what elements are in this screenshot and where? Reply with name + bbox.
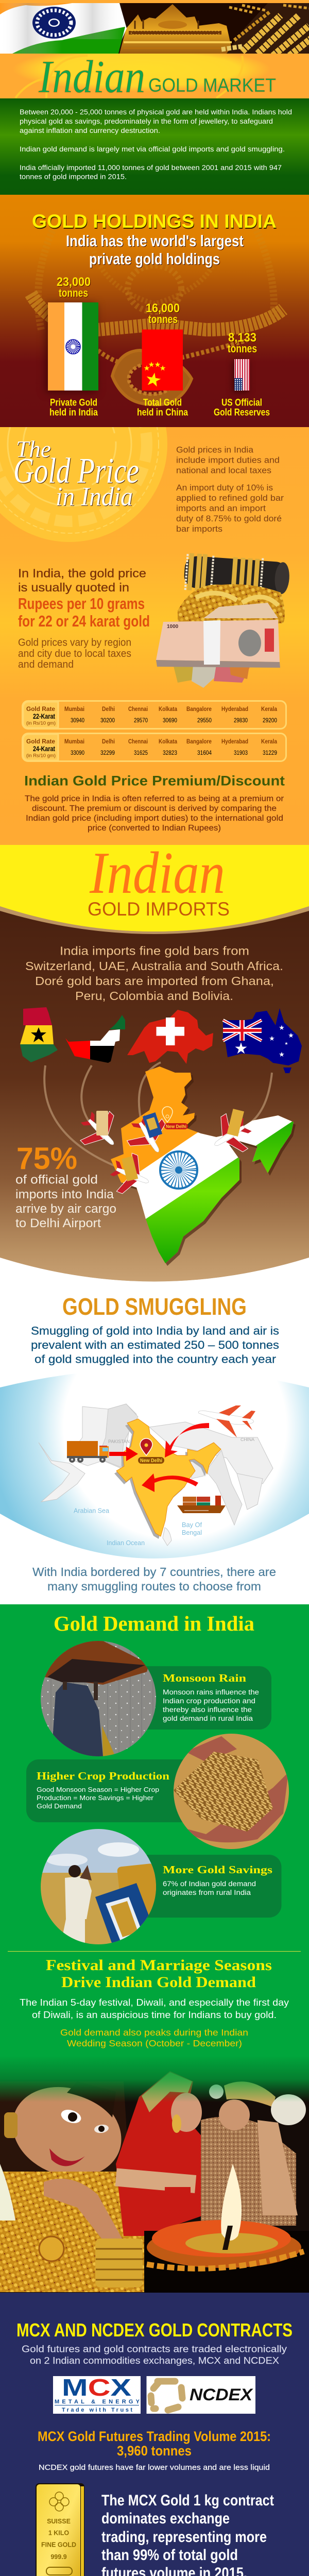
table: 24 karat rates: 31903 xyxy=(234,749,248,756)
table: 24 karat rates: 32299 xyxy=(100,749,115,756)
text: MCX 1 kg contract xyxy=(101,2492,274,2576)
photo panel: weddings and festival lamp xyxy=(0,2056,309,2293)
map labels: Indian Ocean xyxy=(107,1539,145,1547)
icon: 1 kg gold bar: FINE GOLD xyxy=(41,2541,76,2548)
text: quoted in rupees xyxy=(18,567,150,630)
heading: festival and marriage seasons xyxy=(46,1957,272,1991)
table: 22 karat rates: (in Rs/10 gm) xyxy=(26,721,56,726)
stat: 75 percent air cargo: to Delhi Airport xyxy=(15,1216,101,1230)
value: India tonnes xyxy=(57,275,91,299)
table: 24 karat rates xyxy=(23,734,286,761)
title: Indian Gold Market xyxy=(38,52,276,103)
panel: gold holdings in India xyxy=(0,195,309,427)
intro paragraphs xyxy=(20,108,292,180)
text: wedding season xyxy=(60,2027,248,2048)
card: more gold savings: 67% of Indian gold demand xyxy=(163,1880,256,1888)
intro paragraphs: India officially imported 11,000 tonnes of gold between 2001 and 2015 with 947 xyxy=(20,164,282,172)
text: smuggling routes: many smuggling routes to choose from xyxy=(47,1580,261,1593)
panel: gold smuggling xyxy=(0,1258,309,1604)
icon: airplane xyxy=(198,1405,255,1437)
table: 24 karat rates: 31604 xyxy=(197,749,212,756)
logo: MCX: M CX xyxy=(62,2374,131,2401)
table: 24 karat rates: Chennai xyxy=(128,738,148,745)
bar: China flag xyxy=(142,330,183,391)
map marker: New Delhi: New Delhi xyxy=(166,1124,186,1129)
icon: cargo plane 1 with gold bar xyxy=(72,1103,128,1159)
map labels: CHINA xyxy=(241,1437,254,1442)
table: 22 karat rates: Hyderabad xyxy=(221,705,248,713)
value: US tonnes xyxy=(228,331,257,355)
text: source countries: Peru, Colombia and Bolivia. xyxy=(75,989,233,1003)
text: source countries xyxy=(25,944,283,1003)
background necklace xyxy=(25,263,287,406)
heading: Indian gold imports: Indian xyxy=(89,840,225,906)
map shape: Australia: ★ xyxy=(234,1040,248,1057)
text: quoted in rupees: In India, the gold price xyxy=(18,567,146,580)
table: 24 karat rates: 31625 xyxy=(134,749,148,756)
heading: gold holdings: GOLD HOLDINGS IN INDIA xyxy=(32,211,277,232)
logo: MCX xyxy=(53,2374,141,2414)
table: 22 karat rates: Mumbai xyxy=(64,705,84,713)
text: MCX 1 kg contract: than 99% of total gold xyxy=(101,2547,238,2564)
table: 22 karat rates: 29200 xyxy=(263,717,277,724)
heading: premium and discount: Indian Gold Price Premium/Discount xyxy=(24,773,285,788)
card: higher crop production: Good Monsoon Season = Higher Crop xyxy=(37,1786,159,1793)
value: China tonnes: 16,000 xyxy=(146,301,180,315)
table: 24 karat rates: Delhi xyxy=(102,738,115,745)
map marker: New Delhi pin: New Delhi xyxy=(140,1458,162,1464)
panel: MCX and NCDEX gold contracts xyxy=(0,2293,309,2576)
text: MCX 1 kg contract: trading, representing more xyxy=(101,2529,267,2546)
table: 22 karat rates: Delhi xyxy=(102,705,115,713)
table: 22 karat rates: 30200 xyxy=(100,717,115,724)
intro paragraphs: physical gold as savings, predominately in the form of jewellery, to safeguard xyxy=(20,117,273,125)
text: smuggling intro: prevalent with an estimated 250 – 500 tonnes xyxy=(31,1338,279,1351)
text: regional variation: Gold prices vary by region xyxy=(18,637,131,649)
heading: gold price in India: The xyxy=(16,436,51,462)
logo: NCDEX xyxy=(146,2376,255,2414)
photo: oil lamp xyxy=(144,2164,309,2293)
panel: title band xyxy=(0,52,309,103)
text: premium explanation xyxy=(25,794,284,833)
text: premium explanation: price (converted to Indian Rupees) xyxy=(88,824,221,833)
text: quoted in rupees: Rupees per 10 grams xyxy=(18,595,145,613)
map shape: Australia: ★ xyxy=(284,1041,288,1046)
text: Diwali: of Diwali, is an auspicious time for Indians to buy gold. xyxy=(32,2009,277,2020)
map marker: New Delhi xyxy=(162,1107,188,1129)
map labels: PAKISTAN xyxy=(108,1439,130,1445)
neighbouring land xyxy=(39,1404,273,1546)
logo: MCX: METAL & ENERGY xyxy=(55,2399,140,2405)
title: Indian Gold Market: GOLD MARKET xyxy=(148,75,276,96)
table: 22 karat rates: 30690 xyxy=(163,717,177,724)
text: exchanges: on 2 Indian commodities exchanges, MCX and NCDEX xyxy=(30,2355,279,2366)
banner photo: golden temple xyxy=(119,4,233,54)
icon: cargo plane 2 with gold bar xyxy=(121,1108,176,1163)
card: monsoon rain: Monsoon Rain xyxy=(163,1672,246,1684)
banner photo: Indian flag xyxy=(0,3,127,54)
text: duties and taxes: national and local taxes xyxy=(176,466,271,476)
table: 24 karat rates: Kerala xyxy=(261,738,277,745)
divider xyxy=(8,1951,301,1952)
intro paragraphs: Between 20,000 - 25,000 tonnes of physical gold are held within India. Indians hold xyxy=(20,108,292,116)
table: 22 karat rates: 29570 xyxy=(134,717,148,724)
text: MCX volume: MCX Gold Futures Trading Volume 2015: xyxy=(38,2429,271,2444)
heading: festival and marriage seasons: Festival and Marriage Seasons xyxy=(46,1957,272,1974)
heading: gold price in India: in India xyxy=(56,482,133,512)
bar labels: Gold Reserves xyxy=(214,408,270,418)
heading: festival and marriage seasons: Drive Indian Gold Demand xyxy=(61,1974,256,1991)
photo: farmer in wheat field with gold bars xyxy=(41,1829,160,1950)
arrow: land route xyxy=(109,1447,138,1461)
stat: 75 percent air cargo: imports into India xyxy=(15,1188,114,1201)
text: regional variation: and city due to local taxes xyxy=(18,648,131,659)
bar labels: Private Gold xyxy=(50,398,97,408)
icon: 1 kg gold bar: SUISSE xyxy=(47,2518,71,2525)
bar labels xyxy=(49,398,270,418)
photo: hands holding rice xyxy=(174,1734,289,1849)
icon: 1 kg gold bar: 1 KILO xyxy=(48,2530,69,2537)
card: higher crop production: Gold Demand xyxy=(37,1802,82,1810)
table: 24 karat rates: 31229 xyxy=(263,749,277,756)
subheading: India has the world's largest xyxy=(66,232,244,250)
arrow: air route xyxy=(165,1423,209,1458)
value: US tonnes: tonnes xyxy=(228,342,257,355)
text: duties and taxes: imports and an import xyxy=(176,504,266,513)
bar: India flag xyxy=(48,302,98,391)
panel: intro text xyxy=(0,98,309,195)
stat: 75 percent air cargo: 75% xyxy=(16,1141,77,1176)
card: higher crop production: Higher Crop Production xyxy=(37,1770,169,1782)
text: exchanges: Gold futures and gold contracts are traded electronically xyxy=(22,2344,287,2354)
table: 22 karat rates: Chennai xyxy=(128,705,148,713)
map shape: UAE xyxy=(65,1015,125,1063)
value: China tonnes: tonnes xyxy=(148,313,178,326)
table: 22 karat rates: Kolkata xyxy=(159,705,177,713)
text: smuggling intro: Smuggling of gold into India by land and air is xyxy=(31,1325,279,1337)
logo: MCX: Trade with Trust xyxy=(62,2407,132,2413)
table: 22 karat rates: Kerala xyxy=(261,705,277,713)
card: monsoon rain: Indian crop production and xyxy=(163,1697,255,1705)
map shape: Australia: ★ xyxy=(269,1035,275,1042)
map shape: Switzerland xyxy=(127,1010,213,1064)
map labels xyxy=(74,1437,254,1547)
banner photo: gold jewellery xyxy=(221,3,309,56)
text: quoted in rupees: for 22 or 24 karat gold xyxy=(18,612,150,630)
text: MCX volume: NCDEX gold futures have far lower volumes and are less liquid xyxy=(39,2464,270,2472)
table: 24 karat rates: 33090 xyxy=(71,749,84,756)
heading: Indian gold imports: GOLD IMPORTS xyxy=(88,899,230,920)
card: monsoon rain: gold demand in rural India xyxy=(163,1715,253,1722)
photo: bride face and jewellery xyxy=(0,2072,147,2292)
text: MCX 1 kg contract: The MCX Gold 1 kg contract xyxy=(101,2492,274,2509)
table: 24 karat rates: Bangalore xyxy=(186,738,212,745)
table: 22 karat rates: 22-Karat xyxy=(33,712,55,720)
subheading: private gold holdings xyxy=(89,250,220,268)
table: 22 karat rates: 30940 xyxy=(71,717,84,724)
arrow: sea route xyxy=(142,1473,198,1492)
bar: US flag xyxy=(234,359,250,391)
text: premium explanation: Indian gold price (including import duties) to the international gold xyxy=(26,814,283,823)
card: more gold savings: More Gold Savings xyxy=(163,1863,272,1876)
map shape: Australia: ★ xyxy=(279,1050,285,1058)
table: 24 karat rates: Gold Rate xyxy=(26,739,55,745)
table: 22 karat rates: Bangalore xyxy=(186,705,212,713)
table: 22 karat rates: Gold Rate xyxy=(26,706,55,713)
import route arcs xyxy=(44,1062,272,1167)
value: India tonnes: 23,000 xyxy=(57,275,91,289)
photo: woman under umbrella in rain xyxy=(41,1638,156,1756)
text: duties and taxes: Gold prices in India xyxy=(176,446,254,455)
table: 22 karat rates xyxy=(23,701,286,728)
text: smuggling intro xyxy=(31,1325,279,1365)
card: monsoon rain: thereby also influence the xyxy=(163,1706,252,1714)
map marker: New Delhi pin xyxy=(138,1438,164,1464)
text: source countries: India imports fine gold bars from xyxy=(60,944,249,958)
heading: gold demand: Gold Demand in India xyxy=(54,1612,254,1635)
table: 24 karat rates: Mumbai xyxy=(64,738,84,745)
table: 24 karat rates: 24-Karat xyxy=(33,744,55,753)
text: source countries: Doré gold bars are imported from Ghana, xyxy=(35,974,274,988)
icon: cargo ship xyxy=(177,1496,226,1513)
intro paragraphs: against inflation and currency destruction. xyxy=(20,127,160,134)
panel: gold demand in India xyxy=(0,1604,309,2068)
heading: gold smuggling: GOLD SMUGGLING xyxy=(62,1293,247,1320)
table: 24 karat rates: 32823 xyxy=(163,749,177,756)
heading: gold price in India: Gold Price xyxy=(13,451,139,491)
text: Diwali xyxy=(20,1997,289,2020)
text: smuggling intro: of gold smuggled into the country each year xyxy=(35,1353,276,1365)
text: regional variation: and demand xyxy=(18,659,74,670)
text: premium explanation: discount. The premium or discount is derived by comparing the xyxy=(32,804,277,813)
logo: NCDEX: NCDEX xyxy=(190,2385,253,2404)
icon: cargo plane 3 with gold bar xyxy=(204,1107,259,1162)
green fade over photo top xyxy=(0,2056,309,2102)
card: higher crop production: Production = More Savings = Higher xyxy=(37,1794,154,1802)
text: duties and taxes: duty of 8.75% to gold doré xyxy=(176,514,282,523)
value: China tonnes xyxy=(146,301,180,326)
icon: 1 kg gold bar xyxy=(36,2483,84,2576)
panel: header banner xyxy=(0,0,309,56)
table: 24 karat rates: Hyderabad xyxy=(221,738,248,745)
table: 24 karat rates: (in Rs/10 gm) xyxy=(26,753,56,758)
panel: the gold price in India xyxy=(0,427,309,845)
map shape: India in flag colours xyxy=(111,1066,296,1266)
value: US tonnes: 8,133 xyxy=(228,331,256,345)
panel: Indian gold imports xyxy=(0,840,309,1282)
map shape: Australia: ★ xyxy=(288,1031,294,1039)
icon: truck xyxy=(67,1441,109,1463)
map labels: Bay Of xyxy=(182,1521,202,1529)
text: regional variation xyxy=(18,637,131,670)
table: 22 karat rates: 29550 xyxy=(197,717,212,724)
subheading xyxy=(66,232,244,268)
text: source countries: Switzerland, UAE, Australia and South Africa. xyxy=(25,959,283,973)
bar labels: held in India xyxy=(49,408,98,418)
map shape: Australia: ★ xyxy=(279,1024,285,1031)
card: more gold savings: originates from rural India xyxy=(163,1889,251,1896)
text: smuggling routes xyxy=(32,1565,276,1593)
bar labels: Total Gold xyxy=(143,398,182,408)
intro paragraphs: Indian gold demand is largely met via official gold imports and gold smuggling. xyxy=(20,145,285,153)
value: India tonnes: tonnes xyxy=(59,286,88,299)
intro paragraphs: tonnes of gold imported in 2015. xyxy=(20,173,127,180)
table: 22 karat rates: 29830 xyxy=(234,717,248,724)
card: higher crop production xyxy=(26,1759,196,1822)
map labels: Arabian Sea xyxy=(74,1506,110,1515)
map labels: Bengal xyxy=(182,1529,202,1536)
bar labels: held in China xyxy=(137,408,188,418)
text: duties and taxes: bar imports xyxy=(176,524,222,534)
photo: bangles and rupee notes: 1000 xyxy=(167,624,179,630)
smuggling map xyxy=(0,1368,309,1558)
stat: 75 percent air cargo xyxy=(15,1141,116,1230)
icon: 1 kg gold bar: 999.9 xyxy=(50,2553,67,2561)
text: duties and taxes: An import duty of 10% is xyxy=(176,483,273,493)
text: premium explanation: The gold price in India is often referred to as being at a premium or xyxy=(25,794,284,803)
decorative mandala xyxy=(0,427,167,542)
text: exchanges xyxy=(22,2344,287,2366)
text: quoted in rupees: is usually quoted in xyxy=(18,581,129,594)
icon: cargo plane 4 with gold bar xyxy=(105,1148,157,1201)
stat: 75 percent air cargo: of official gold xyxy=(15,1173,98,1187)
text: duties and taxes: applied to refined gold bar xyxy=(176,494,284,503)
card: monsoon rain: Monsoon rains influence the xyxy=(163,1688,259,1696)
map shape: Australia xyxy=(222,1008,302,1073)
text: MCX 1 kg contract: dominates exchange xyxy=(101,2510,230,2527)
text: smuggling routes: With India bordered by 7 countries, there are xyxy=(32,1565,276,1579)
text: MCX volume xyxy=(38,2429,271,2472)
table: 24 karat rates: Kolkata xyxy=(159,738,177,745)
photo: couple xyxy=(115,2071,306,2236)
heading: gold price in India xyxy=(13,436,139,512)
bar labels: US Official xyxy=(221,398,262,408)
photo: bangles and rupee notes xyxy=(156,553,290,688)
card: monsoon rain xyxy=(103,1666,271,1730)
map shape: Ghana xyxy=(20,1007,58,1062)
text: duties and taxes: include import duties and xyxy=(176,456,280,465)
stat: 75 percent air cargo: arrive by air cargo xyxy=(15,1202,116,1216)
text: MCX volume: 3,960 tonnes xyxy=(117,2443,192,2459)
text: Diwali: The Indian 5-day festival, Diwali, and especially the first day xyxy=(20,1997,289,2008)
text: duties and taxes xyxy=(176,446,284,534)
title: Indian Gold Market: Indian xyxy=(38,52,145,103)
text: wedding season: Wedding Season (October - December) xyxy=(67,2038,242,2048)
text: wedding season: Gold demand also peaks during the Indian xyxy=(60,2027,248,2038)
card: more gold savings xyxy=(103,1855,281,1918)
India highlighted xyxy=(114,1419,221,1539)
